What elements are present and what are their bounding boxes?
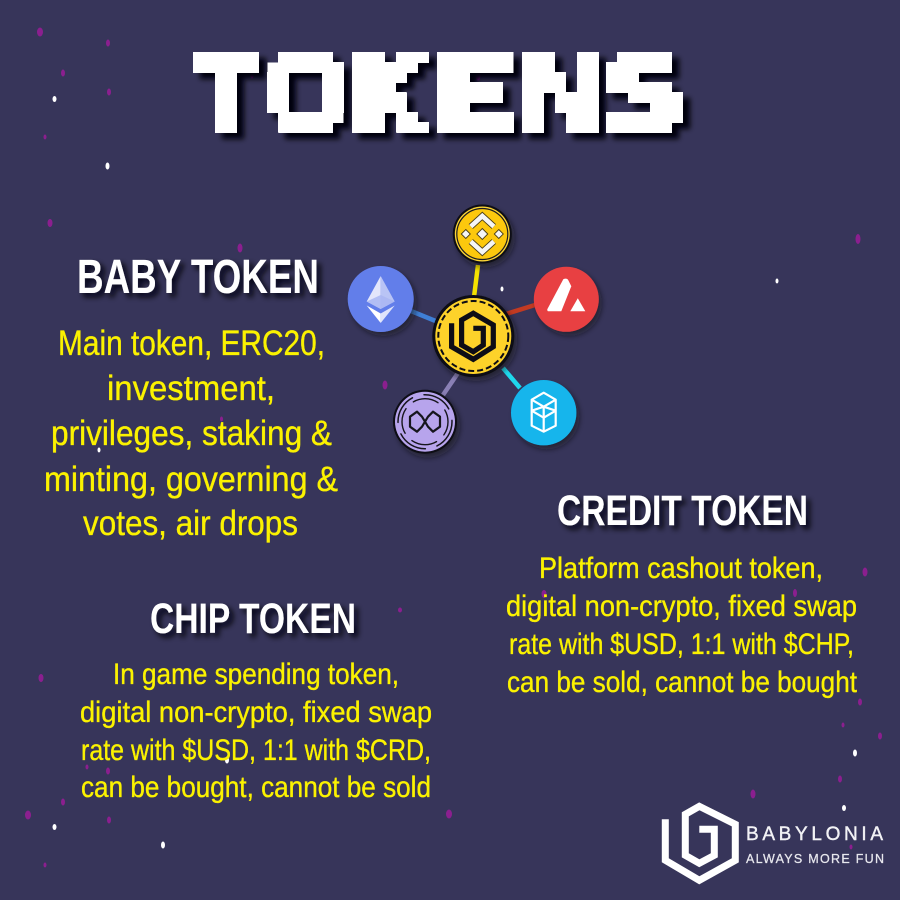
text block: credit token description: [506, 552, 857, 699]
connector lines: [411, 265, 535, 395]
text block: credit token description: can be sold, cannot be bought: [507, 666, 857, 699]
text block: baby token description: votes, air drops: [83, 504, 298, 543]
title: K: [350, 35, 432, 156]
text block: baby token description: [44, 324, 338, 543]
panel: baby token: [44, 251, 338, 543]
text block: chip token description: In game spending token,: [113, 658, 399, 691]
brand tagline: ALWAYS MORE FUN: [746, 852, 884, 866]
title: S: [601, 33, 689, 155]
network diagram: [348, 204, 599, 454]
panel: credit token: [506, 487, 857, 699]
title: N: [514, 34, 607, 156]
brand logo: [665, 806, 884, 880]
icon: polygon coin: [393, 390, 457, 454]
title: E: [427, 34, 517, 156]
text block: chip token description: rate with $USD, 1:1 with $CRD,: [81, 734, 431, 767]
icon: babylonia center coin: [432, 295, 514, 377]
text block: credit token description: Platform cashout token,: [539, 552, 823, 585]
text block: baby token description: minting, governing &: [44, 460, 338, 499]
panel: chip token: [80, 595, 432, 804]
text block: credit token description: digital non-crypto, fixed swap: [506, 590, 857, 623]
title: T: [194, 33, 258, 156]
text block: chip token description: digital non-crypto, fixed swap: [80, 696, 432, 729]
icon: fantom coin: [511, 380, 576, 445]
text block: chip token description: [80, 658, 432, 804]
icon: ethereum coin: [348, 266, 414, 332]
heading: chip token: CHIP TOKEN: [150, 595, 356, 643]
icon: avalanche coin: [534, 267, 599, 332]
heading: baby token: BABY TOKEN: [77, 251, 319, 304]
text block: chip token description: can be bought, cannot be sold: [81, 771, 431, 804]
title: [194, 33, 689, 156]
icon: babylonia hexagon: [665, 806, 735, 880]
text block: baby token description: Main token, ERC20,: [58, 324, 325, 363]
text block: baby token description: privileges, staking &: [51, 414, 332, 453]
title: O: [264, 34, 348, 156]
text block: baby token description: investment,: [107, 369, 275, 408]
brand name: BABYLONIA: [746, 824, 883, 845]
icon: binance coin: [453, 204, 512, 264]
heading: credit token: CREDIT TOKEN: [557, 487, 808, 535]
